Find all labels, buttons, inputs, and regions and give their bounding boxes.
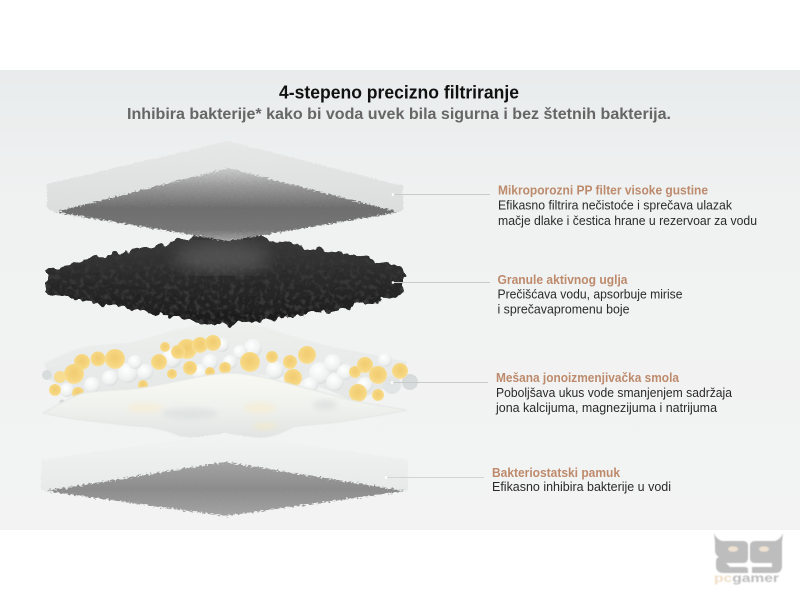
label: activated carbon <box>392 273 683 316</box>
PP filter top face <box>47 141 403 240</box>
label: PP filter: mačje dlake i čestica hrane u rezervoar za vodu <box>498 214 757 228</box>
resin lower sheet shading <box>127 400 337 429</box>
carbon body <box>46 233 404 325</box>
label: PP filter: Efikasno filtrira nečistoće i sprečava ulazak <box>498 198 733 212</box>
label: resin <box>391 371 732 415</box>
label: PP filter <box>392 184 757 228</box>
resin lower sheet <box>43 373 407 438</box>
layer: bacteriostatic cotton <box>41 433 408 516</box>
layer: activated carbon granules <box>46 233 404 325</box>
logo text: pc gamer <box>714 571 779 585</box>
cotton dark face <box>46 462 405 516</box>
label: PP filter: Mikroporozni PP filter visoke gustine <box>498 184 708 198</box>
label: activated carbon: Granule aktivnog uglja <box>498 273 629 287</box>
layer: PP filter <box>47 141 403 241</box>
logo eyes <box>728 546 769 552</box>
label: resin: Poboljšava ukus vode smanjenjem sadržaja <box>496 386 732 400</box>
logo mark <box>714 533 783 573</box>
label: cotton <box>385 466 671 494</box>
title: 4-stepeno precizno filtriranje <box>279 82 519 102</box>
logo: pcgamer <box>714 533 783 585</box>
label: activated carbon: Prečišćava vodu, apsorbuje mirise <box>498 288 683 302</box>
label: activated carbon: i sprečavapromenu boje <box>498 302 630 316</box>
label: cotton: Bakteriostatski pamuk <box>492 466 620 480</box>
background panel <box>0 70 800 530</box>
carbon centre highlight <box>174 243 270 273</box>
label: cotton: Efikasno inhibira bakterije u vodi <box>492 480 671 494</box>
cotton top face <box>41 433 408 516</box>
label: resin: Mešana jonoizmenjivačka smola <box>496 371 680 385</box>
resin upper sheet <box>44 320 407 400</box>
layer: resin filter <box>42 320 418 438</box>
PP filter dark face <box>56 168 398 241</box>
subtitle: Inhibira bakterije* kako bi voda uvek bila sigurna i bez štetnih bakterija. <box>127 106 671 123</box>
label: resin: jona kalcijuma, magnezijuma i natrijuma <box>495 401 717 415</box>
resin beads <box>42 335 418 404</box>
